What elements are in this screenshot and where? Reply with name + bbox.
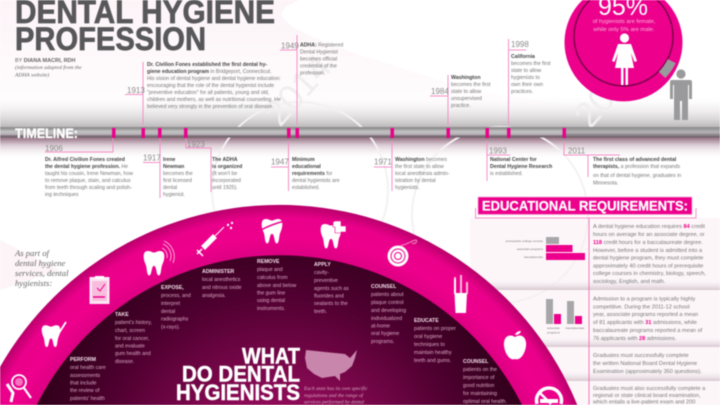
- arc panel: [0, 205, 577, 405]
- event 1947: for: [325, 171, 333, 177]
- service: counsel on nutrition: optimal oral health.: [463, 399, 507, 405]
- event 1917: Newman: [163, 164, 184, 170]
- event 1913: children and mothers, as well as nutritional counseling. He: [147, 97, 281, 103]
- event 1998: state to allow: [511, 68, 542, 74]
- byline: [14, 58, 82, 78]
- event 1917: first licensed: [163, 178, 192, 184]
- watermark seal: 2014: [565, 48, 650, 135]
- icon: no smoking: [536, 388, 562, 404]
- bar chart: credit hours: baccalaureate: [524, 255, 543, 259]
- text block: credit hours: 118: [593, 240, 602, 246]
- event 1906: the dental hygiene profession.: [45, 164, 121, 170]
- service: expose: process, and: [161, 293, 191, 299]
- bar chart: applicants and admissions: associate: [547, 326, 560, 330]
- event 1947: 1947: [271, 158, 289, 166]
- text block: admission: Admission to a program is typically highly: [593, 296, 695, 302]
- watermark seal: 2014: [255, 46, 340, 133]
- event 1998: becomes the first: [511, 61, 551, 67]
- event 1923: The ADHA: [212, 157, 238, 163]
- icon: US map: [305, 350, 357, 381]
- event 1906: Dr. Alfred Civilion Fones created: [45, 157, 125, 163]
- service: counsel on plaque control: programs.: [371, 339, 394, 345]
- event 1971: local anesthesia admin-: [395, 171, 450, 177]
- event 1971: Washington: [395, 157, 424, 163]
- event 1984: unsupervised: [451, 96, 482, 102]
- event 1971: hygienists.: [395, 185, 420, 191]
- event 2011: on that of dental hygiene, graduates in: [593, 173, 681, 179]
- event 2011: [564, 141, 681, 186]
- service: expose: dental: [161, 309, 175, 315]
- event 1993: Dental Hygiene Research: [490, 164, 552, 170]
- service: counsel on plaque control: at-home: [371, 324, 390, 330]
- service: counsel on plaque control: [371, 284, 406, 345]
- text block: admission: baccalaureate programs reported a mean of: [593, 328, 703, 334]
- service: educate: patients on proper: [414, 326, 456, 332]
- service: expose: [161, 285, 191, 330]
- section separators: [470, 218, 720, 405]
- service: educate: oral hygiene: [414, 334, 442, 340]
- service: administer: and nitrous oxide: [202, 285, 242, 291]
- state regulations note: regulations and the range of: [304, 392, 364, 399]
- icon: tooth with check: [42, 322, 66, 347]
- event 1947: dental hygienists are: [292, 178, 340, 184]
- event 1971: the first state to allow: [395, 164, 444, 170]
- intro text: As part of: [14, 248, 51, 258]
- service: apply: preventive: [314, 278, 338, 284]
- bar chart: credit hours: [506, 237, 585, 260]
- event 1913: encouraging that the role of the dental hygienist include: [147, 83, 274, 89]
- icon: clipboard: [90, 276, 110, 304]
- service: administer: [202, 269, 242, 299]
- service: perform: patients' health: [70, 396, 105, 402]
- service: apply: sealants to the: [314, 301, 348, 307]
- event 1949: becomes official: [300, 56, 337, 62]
- service: take: TAKE: [115, 312, 129, 318]
- event 1947: educational: [292, 164, 321, 170]
- text block: national board exam: Graduates must successfully complete: [593, 353, 689, 359]
- service: administer: ADMINISTER: [202, 269, 235, 275]
- text block: clinical exam: regional or state clinical board examination,: [593, 393, 701, 399]
- event 1947: [271, 141, 340, 191]
- icon: tooth with plaque: [261, 219, 285, 243]
- event 1923: incorporated: [212, 178, 241, 184]
- icon: toothbrushes in cup: [454, 275, 467, 313]
- intro text: services, dental: [15, 268, 69, 278]
- center heading: [176, 344, 300, 405]
- intro text: dental hygiene: [15, 258, 66, 268]
- text block: admission: 31 admissions, while: [645, 320, 697, 326]
- gender statistic circle: while only 5% are male.: [592, 27, 655, 33]
- service: apply: fluorides and: [314, 294, 344, 300]
- text block: admission: 76 applicants with: [593, 336, 639, 342]
- bar chart: applicants and admissions: [546, 299, 585, 334]
- service: remove: REMOVE: [257, 259, 280, 265]
- event 2011: therapists,: [593, 164, 620, 170]
- gender statistic circle: of hygienists are female,: [593, 19, 656, 25]
- event 1923: until 1925).: [212, 185, 238, 191]
- service: perform: assessments: [70, 373, 101, 379]
- event 1917: hygienist.: [163, 192, 185, 198]
- event 1949: Registered: [317, 42, 343, 48]
- event 1913: in Bridgeport, Connecticut.: [209, 69, 272, 75]
- service: remove: [257, 259, 296, 312]
- service: counsel on nutrition: importance of: [463, 375, 495, 381]
- event 1913: His vision of dental hygiene and dental hygiene education:: [147, 76, 281, 82]
- service: apply: [314, 262, 349, 315]
- service: perform: oral health care: [70, 365, 106, 371]
- service: remove: plaque and: [257, 267, 283, 273]
- text block: admission: year, associate programs reported a mean: [593, 312, 698, 318]
- event 1971: [374, 141, 450, 191]
- text block: credit hours: credit hours for a baccalaureate degree.: [602, 240, 703, 246]
- text block: credit hours: dental hygiene program, they must complete: [593, 256, 703, 262]
- service: educate: maintain healthy: [414, 350, 452, 356]
- service: educate: techniques to: [414, 342, 445, 348]
- event 2011: a profession that expands: [619, 164, 680, 170]
- event 1998: 1998: [511, 40, 529, 49]
- event 1993: [487, 141, 552, 181]
- event 1913: giene education program: [147, 69, 209, 75]
- text block: admission: of 81 applicants with: [593, 320, 645, 326]
- text block: credit hours: hours on average for an associate degree, or: [593, 232, 705, 238]
- event 1947: Minimum: [292, 157, 315, 163]
- event 1947: requirements: [292, 171, 325, 177]
- event 1984: becomes the first: [451, 82, 491, 88]
- event 1913: believed very strongly in the prevention of oral disease.: [147, 104, 274, 110]
- event 1998: practices.: [511, 89, 533, 95]
- event 1971: becomes: [424, 157, 447, 163]
- event 1906: [45, 138, 133, 198]
- event 1913: 1913: [127, 86, 145, 95]
- service: expose: (x-rays).: [161, 324, 180, 330]
- text block: admission: competitive. During the 2011-12 school: [593, 304, 690, 310]
- service: take: and evaluate: [115, 344, 145, 350]
- service: counsel on plaque control: individualized: [371, 316, 402, 322]
- service: perform: [70, 357, 106, 402]
- event 1906: ing techniques: [45, 192, 79, 198]
- text block: credit hours: sociology, English, and math.: [593, 279, 666, 285]
- event 1998: California: [511, 54, 535, 60]
- service: counsel on plaque control: oral hygiene: [371, 331, 399, 337]
- event 1998: own their own: [511, 82, 543, 88]
- event 1984: Washington: [451, 75, 480, 81]
- service: perform: the review of: [70, 388, 100, 394]
- event 1923: [186, 138, 242, 192]
- service: take: patient's history,: [115, 320, 152, 326]
- service: educate: [414, 318, 456, 364]
- event 1917: dental: [163, 185, 177, 191]
- text block: credit hours: 84 credit: [684, 224, 705, 230]
- event 1947: established.: [292, 185, 320, 191]
- center heading: WHAT: [242, 344, 300, 368]
- event 1971: 1971: [374, 158, 392, 166]
- bar chart: credit hours: associate programs: [517, 247, 543, 251]
- icon: apple: [504, 331, 526, 359]
- service: counsel on nutrition: for maintaining: [463, 391, 497, 397]
- service: apply: APPLY: [314, 262, 331, 268]
- byline: BY DIANA MACRI, RDH: [15, 58, 76, 64]
- icon: tooth with signal waves: [144, 241, 174, 275]
- event 1993: National Center for: [490, 157, 537, 163]
- event 2011: The first class of advanced dental: [593, 157, 677, 163]
- service: remove: instruments.: [257, 306, 285, 312]
- byline: (information adapted from the: [15, 64, 82, 71]
- event 1906: to remove plaque, stain, and calculus: [45, 178, 131, 184]
- service: expose: radiographs: [161, 316, 189, 322]
- event 1949: profession.: [300, 70, 325, 76]
- event 1984: state to allow: [451, 89, 482, 95]
- intro text: hygienists:: [15, 278, 52, 288]
- event 1993: 1993: [489, 146, 507, 156]
- educational requirements heading: EDUCATIONAL REQUIREMENTS:: [482, 198, 688, 214]
- service: remove: the gum line: [257, 290, 285, 296]
- service: remove: using dental: [257, 298, 285, 304]
- icon: tooth with sealant: [321, 221, 346, 248]
- event 1917: Irene: [163, 157, 176, 163]
- text block: clinical exam: Graduates must also successfully complete a: [593, 386, 706, 392]
- event 1949: [280, 35, 343, 125]
- event 1949: credential of the: [300, 64, 337, 70]
- event 1913: "preventive education" for all patients, young and old,: [147, 90, 269, 96]
- event 1906: 1906: [45, 144, 63, 153]
- event 1984: [430, 75, 491, 125]
- service: counsel on nutrition: COUNSEL: [463, 359, 489, 365]
- service: take: for oral cancer,: [115, 336, 149, 342]
- service: take: gum health and: [115, 351, 151, 357]
- service: counsel on plaque control: patients about: [371, 292, 404, 298]
- event 1906: He: [120, 164, 128, 170]
- event 1971: istration by dental: [395, 178, 436, 184]
- event 2011: 2011: [568, 146, 586, 156]
- byline: ADHA website): [14, 72, 49, 78]
- service: perform: PERFORM: [70, 357, 96, 363]
- service: counsel on nutrition: patients on the: [463, 367, 497, 373]
- text block: credit hours: A dental hygiene education requires: [593, 224, 684, 230]
- event 1984: 1984: [431, 87, 449, 96]
- event 1923: is organized: [212, 164, 242, 170]
- event 1917: 1917: [143, 154, 161, 162]
- service: apply: agents such as: [314, 286, 349, 292]
- service: take: chart, screen: [115, 328, 145, 334]
- service: remove: calculus from: [257, 275, 288, 281]
- timeline bar: [0, 127, 720, 138]
- event 1906: from teeth through scaling and polish-: [45, 185, 132, 191]
- bar chart: credit hours: prerequisite college courses: [506, 239, 543, 243]
- text block: national board exam: Examination (approximately 350 questions).: [593, 369, 702, 375]
- event 1998: [508, 39, 551, 125]
- watermark seal: [212, 46, 650, 303]
- service: counsel on plaque control: plaque control: [371, 300, 404, 306]
- icon: woman: [612, 33, 637, 85]
- title: [15, 0, 275, 57]
- event 1913: [125, 62, 281, 125]
- service: remove: above and below: [257, 283, 296, 289]
- service: administer: local anesthetics: [202, 277, 241, 283]
- event 1923: (It won't be: [212, 171, 237, 177]
- event 1906: taught his cousin, Irene Newman, how: [45, 171, 133, 177]
- service: counsel on plaque control: COUNSEL: [371, 284, 397, 290]
- text block: national board exam: the written National Board Dental Hygiene: [593, 361, 697, 367]
- event 2011: Minnesota.: [593, 180, 618, 186]
- service: take: disease.: [115, 359, 134, 365]
- service: counsel on plaque control: and developing: [371, 308, 406, 314]
- state regulations note: Each state has its own specific: [303, 385, 368, 392]
- service: take: [115, 312, 152, 365]
- bar chart: applicants and admissions: programs: [547, 330, 560, 334]
- service: perform: that include: [70, 380, 97, 386]
- service: apply: teeth.: [314, 309, 327, 315]
- service: apply: cavity-: [314, 270, 329, 276]
- event 1993: is established.: [490, 171, 523, 177]
- bar chart: applicants and admissions: baccalaureate: [566, 326, 585, 330]
- text block: credit hours: However, before a student is admitted into a: [593, 248, 703, 254]
- text block: credit hours: approximately 40 credit hours of prerequisite: [593, 264, 703, 270]
- icon: magnifier on tooth: [7, 375, 31, 402]
- icon: syringe: [197, 222, 233, 256]
- service: counsel on nutrition: good nutrition: [463, 383, 495, 389]
- text block: credit hours: college courses in chemistry, biology, speech,: [593, 271, 706, 277]
- title: PROFESSION: [15, 21, 206, 57]
- text block: admission: 28 admissions.: [639, 336, 676, 342]
- service: educate: EDUCATE: [414, 318, 439, 324]
- event 1998: hygienists to: [511, 75, 540, 81]
- icon: man: [670, 69, 692, 120]
- event 1917: becomes the: [163, 171, 193, 177]
- event 1917: [143, 138, 193, 198]
- service: expose: EXPOSE,: [161, 285, 184, 291]
- service: expose: interpret: [161, 301, 181, 307]
- event 1949: Dental Hygienist: [300, 50, 338, 56]
- service: educate: teeth and gums.: [414, 358, 451, 364]
- icon: dental floss: [388, 240, 417, 266]
- service: administer: analgesia.: [202, 293, 226, 299]
- event 1913: Dr. Civilion Fones established the first dental hy-: [147, 62, 267, 68]
- center heading: DO DENTAL: [182, 362, 300, 386]
- event 1923: 1923: [187, 140, 205, 149]
- event 1949: ADHA:: [300, 42, 317, 48]
- center heading: HYGIENISTS: [176, 380, 300, 405]
- event 1984: practice.: [451, 103, 471, 109]
- event 1949: 1949: [281, 42, 299, 50]
- timeline heading: TIMELINE:: [15, 126, 78, 141]
- gender statistic circle: [564, 0, 683, 101]
- service: counsel on nutrition: [463, 359, 507, 405]
